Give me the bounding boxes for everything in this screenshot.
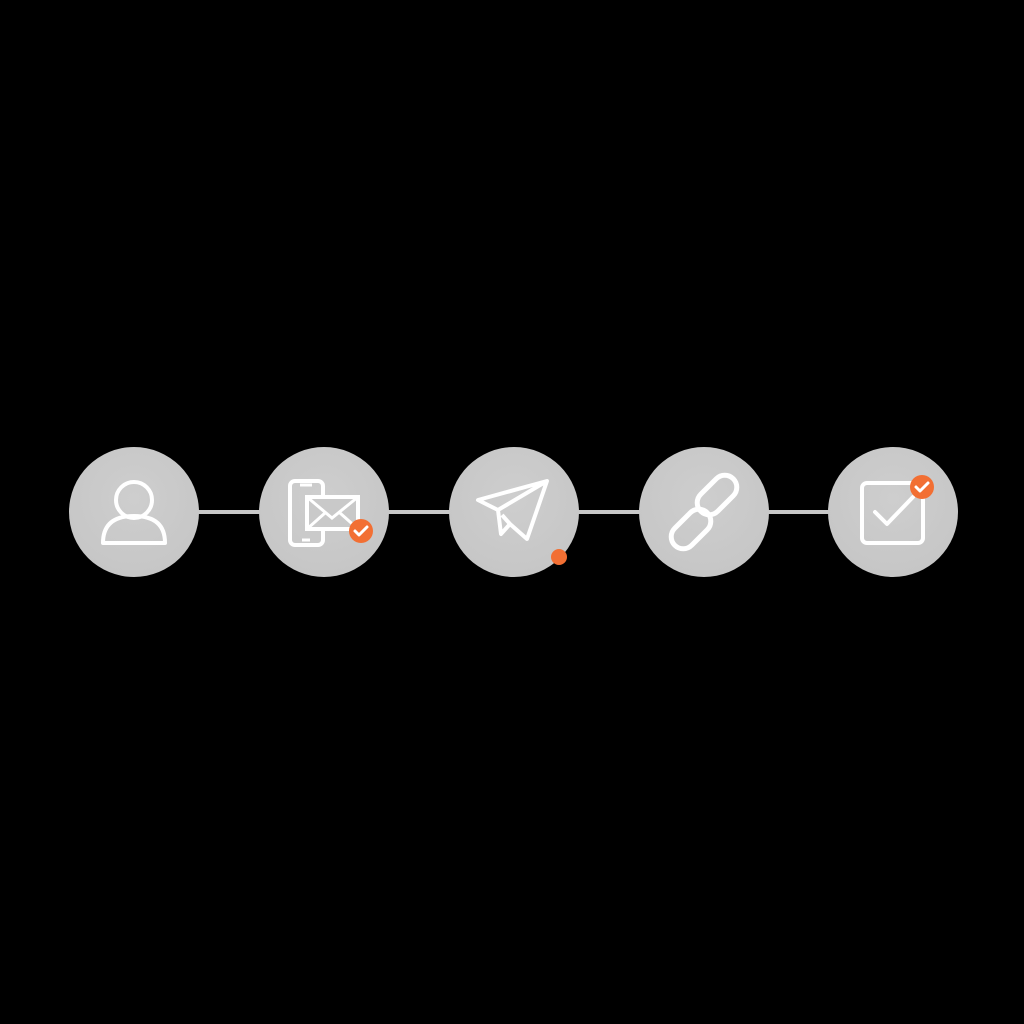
orange dot <box>551 549 567 565</box>
connector line <box>134 510 893 514</box>
step 5: checkbox icon <box>828 447 958 577</box>
badge: check <box>910 475 934 499</box>
step 3: paper plane icon <box>449 447 579 577</box>
step 4: link icon <box>639 447 769 577</box>
step 2: phone with email icon <box>259 447 389 577</box>
step 1: user icon <box>69 447 199 577</box>
badge: check <box>349 519 373 543</box>
